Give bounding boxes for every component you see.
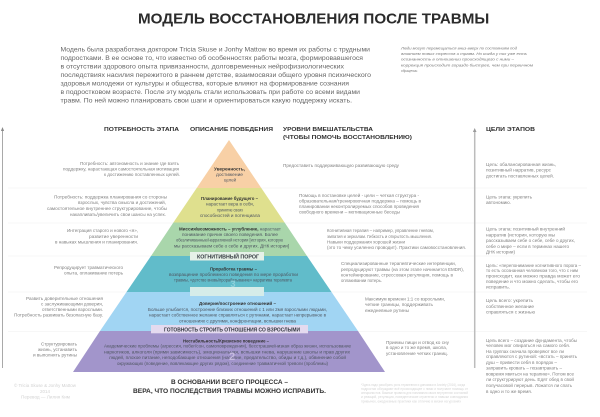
intro text block: травм. По ней можно планировать свои шаги и ориентироваться какую поддержку искать. <box>60 96 352 104</box>
pyramid level: trust <box>100 292 358 331</box>
goal: row 2 <box>486 194 533 205</box>
intervention: row 2: образовательная/тренировочная поддержка – помощь в <box>299 198 422 204</box>
need: row 1: поддержку, нарастающая самостоятельная мотивация <box>63 166 179 172</box>
need: row 2: самостоятельное внутреннее структурирование, чтобы <box>47 206 167 211</box>
text: confidence level: Уверенность, <box>214 166 245 172</box>
goal: row 4: то есть осознанная человеком того, что с ним <box>486 268 578 273</box>
intervention: row 4: контейнирование, стрессовая регуляция, помощь в <box>341 272 454 278</box>
need: row 4: опыта, оплакивание потерь <box>64 270 124 276</box>
text: confidence level: достижение <box>216 172 244 177</box>
bottom statement: В ОСНОВАНИИ ВСЕГО ПРОЦЕССА – <box>171 379 288 386</box>
text: trauma processing level <box>169 266 299 289</box>
text: trust level: Доверие/построение отношений – <box>199 300 276 306</box>
footnote: подростки обсуждают всё происходящее с ними и получают помощь от <box>361 387 469 391</box>
need: row 6: и выполнять рутины <box>33 352 77 358</box>
intervention: row 3: эмпатия и зеркалам. Гибкость и открытость мышления. <box>327 234 432 239</box>
intervention: row 3: Когнитивная терапия – например, управление гневом, <box>327 228 434 233</box>
intervention: row 4 <box>341 261 464 283</box>
goal: row 1: позитивный нарратив, ресурс <box>486 166 552 172</box>
need: row 1 <box>63 161 180 177</box>
goal: row 6: человек мог опираться на самого себя. <box>486 343 570 348</box>
footnote: специалистов. Важные правила для понимания своих внутренних состояний <box>361 391 468 395</box>
text: planning level: принятие своих <box>217 207 244 212</box>
text: unstable behaviour level: Академические проблемы (агрессия, побег/сон, самоповреждения), бесстрашие/низкая образ жизни, использование <box>104 344 352 349</box>
need: row 6: жизнь, устанавить <box>38 347 78 352</box>
intervention column <box>283 163 466 356</box>
goal: row 4: Цель: «перепонимание когнитивного порога – <box>486 263 581 268</box>
intervention: row 5: Максимум времени 1:1 со взрослыми, <box>365 296 445 302</box>
goal: row 2: Цель этапа: укрепить <box>486 194 533 200</box>
goal: row 3 <box>486 226 575 254</box>
text: mission level <box>174 225 289 248</box>
need: row 4 <box>54 265 124 276</box>
intervention: row 6: в одно и то же время, школа, <box>386 345 447 350</box>
goal: row 5: справляться с жизнью <box>486 310 536 314</box>
goal: row 6: ли структурируют день. Едят обед в свой <box>486 376 574 382</box>
text: confidence level <box>214 166 245 182</box>
footnote: привычек, ежедневные практики как отличие в жизни на уровнях <box>361 400 461 404</box>
intervention: row 3: Навыки поддержания хорошей жизни <box>327 238 405 244</box>
goal: row 6: получасовой перерыв. Ложатся ли спать <box>486 382 573 388</box>
title: МОДЕЛЬ ВОССТАНОВЛЕНИЯ ПОСЛЕ ТРАВМЫ <box>138 12 489 27</box>
text: trust level: нарастает собственное желание справляться с рутинами, нарастает непрерывное в <box>149 313 327 318</box>
side note <box>400 46 533 73</box>
text: planning level <box>200 195 260 218</box>
goal: row 6: душ – привести себя в порядок – <box>486 360 557 365</box>
text: trauma processing level: травмы, «детство вновь/прорабатывание» нарратива терапевта <box>174 277 292 282</box>
goal: row 3: ДНК истории) <box>486 250 515 254</box>
need: row 2 <box>47 194 167 217</box>
side note: влиянием новых стрессов и травм. Но когда у них уже есть <box>401 51 527 56</box>
intro text block: здоровья молодежи от культуры и общества, которые влияют на формирование сознания <box>60 79 349 87</box>
column headings: (ЧТОБЫ ПОМОЧЬ ВОССТАНОВЛЕНИЮ) <box>283 135 412 141</box>
text: trauma processing level: 3 <box>230 279 236 289</box>
goal: row 6: заправить кровать – позавтракать – <box>486 366 562 370</box>
need: row 5: ответственными взрослыми. <box>42 307 103 312</box>
text: mission level: мы рассказываем себе о себе и других. ДНК истории] <box>174 243 289 248</box>
text: unstable behaviour level: 2 <box>229 351 235 363</box>
copyright credit: Перевод — Лилия Ким <box>21 394 70 400</box>
label: cognitive threshold: КОГНИТИВНЫЙ ПОРОГ <box>197 252 259 260</box>
goal: row 6: справляются с рутиной: «встать – принять <box>486 353 578 359</box>
intervention: row 3: (это то чему усиленно проводит). Практики самовосстановления. <box>327 245 466 250</box>
goal: row 1: Цель: обалансированная жизнь, <box>486 162 556 167</box>
text: trauma processing level: Проработка травмы – <box>210 266 257 272</box>
intervention: row 4: репродуцируют травмы (на этом этапе начинается EMDR), <box>341 267 464 272</box>
bottom statement: ВЕРА, ЧТО ПОСЛЕДСТВИЯ ТРАВМЫ МОЖНО ИСПРАВИТЬ. <box>133 388 326 395</box>
goal: row 3: себе о мире – если в терминах нашего <box>486 244 569 249</box>
goal: row 3: нарратив (история, которую мы <box>486 232 555 238</box>
arrow: left vertical axis <box>1 127 4 368</box>
copyright credit: 2014 <box>40 389 50 394</box>
bottom statement <box>133 379 326 395</box>
intervention: row 6 <box>386 340 450 356</box>
intro text block: последствиях насилия пережитого в раннем детстве, взаимосвязи общего уровня психического <box>60 71 372 79</box>
intervention: row 6: установление четких границ. <box>386 351 448 356</box>
label: readiness to build relationships <box>151 325 308 334</box>
label: empty threshold bar <box>190 287 264 296</box>
need: row 3 <box>55 228 138 244</box>
goal: row 5: Цель всего: укрепить <box>486 298 534 303</box>
goal: row 4: исправить. <box>486 284 510 290</box>
intro text block: Модель была разработана доктором Tricia Skuse и Jonhy Mattow во время их работы с трудными <box>60 46 371 54</box>
side note: обращении. <box>401 68 418 73</box>
need: row 5: с заслуживающими доверия, <box>41 302 103 306</box>
goals column <box>486 162 581 394</box>
intervention: row 6: Приемы пищи и отвод ко сну <box>386 340 450 345</box>
need: row 6 <box>33 342 78 358</box>
footnote <box>361 383 469 404</box>
copyright credit: © Tricia Skuse & Jonhy Mattow <box>14 382 77 388</box>
arrow: right vertical axis <box>473 128 476 368</box>
need: row 6: Структурировать <box>41 342 78 346</box>
goal: row 4: поведение и что можно сделать, чтобы его <box>486 279 578 284</box>
need: row 3: в навыках мышления и планирования. <box>55 240 138 244</box>
intervention: row 4: оплакивании потерь. <box>341 278 382 283</box>
need: row 2: накапливать/увеличить свои шансы на успех. <box>70 212 166 217</box>
text: confidence level: целей <box>224 176 236 182</box>
goal: row 1: достигать поставленных целей. <box>486 172 554 178</box>
need: row 5: Развить доверительные отношения <box>26 296 104 301</box>
side note: Люди могут перемещаться вниз-вверх по состояниям под <box>400 46 518 50</box>
side note: коррекция происходит гораздо быстрее, чем при первичном <box>401 62 533 67</box>
need: row 3: развитие уверенности <box>89 234 138 239</box>
need: row 5: Потребность развивать безопасную базу. <box>14 312 103 318</box>
need: row 4: Репродуцирует травматического <box>54 265 123 270</box>
text: mission level: понимание причин своего поведения. Более <box>182 232 279 237</box>
intervention: row 2 <box>299 192 422 214</box>
intervention: row 3 <box>327 228 466 250</box>
goal: row 6: На группах сначала проверяют все ли <box>486 349 564 354</box>
need: row 2: Потребность: поддержка планирования со стороны <box>54 194 167 200</box>
intervention: row 2: свободного времени – мотивационные беседы <box>299 210 400 214</box>
goal: row 3: Цель этапа: позитивный внутренний <box>486 226 565 232</box>
goal: row 6: вовремя явиться на терапию». Потом все <box>486 372 574 376</box>
column headings: ОПИСАНИЕ ПОВЕДЕНИЯ <box>190 127 273 133</box>
text: unstable behaviour level: окружающих (поведение, вовлекающее других рядом), соединение травматичной тревоги (проблемы) <box>117 360 328 366</box>
column headings: ПОТРЕБНОСТЬ ЭТАПА <box>104 127 180 133</box>
needs column <box>14 161 180 358</box>
intervention: row 5: ежедневные рутины <box>365 308 409 313</box>
text: unstable behaviour level <box>104 337 352 366</box>
text: trust level <box>148 300 327 323</box>
goal: row 6: в одно и то же время. <box>486 389 532 394</box>
pyramid level: trauma processing <box>126 256 332 292</box>
text: mission level: обезличиванные/нарративной истории [история, которую <box>176 237 284 243</box>
intervention: row 4: Специализированные терапевтические интервенции, <box>341 261 456 266</box>
text: unstable behaviour level: Нестабильность/Кризисное поведение – <box>183 337 269 343</box>
goal: row 6 <box>486 338 578 394</box>
text: planning level: способностей и потенциала <box>200 212 260 218</box>
text: unstable behaviour level: людей, плохое питание, неподобающие отношения (насилие, предательство, обиды и т.д.), обвинение собой <box>109 354 346 360</box>
label: cognitive threshold <box>190 252 264 260</box>
text: trauma processing level: возвращение проблемного поведения по мере проработки <box>169 272 299 277</box>
goal: row 4 <box>486 263 581 290</box>
goal: row 4: происходит, как можно правда может его <box>486 274 580 278</box>
footnote: *Здесь надо разобрать роль терапевтов и динамики в Anxiety (2016), когда <box>361 383 465 387</box>
pyramid level: mission <box>151 222 307 256</box>
pyramid level: planning <box>173 188 285 222</box>
need: row 3: Интеграция старого и нового «я», <box>67 228 138 233</box>
need: row 1: к достижению поставленных целей. <box>104 171 180 177</box>
need: row 1: Потребность: автономность и знание где взять <box>80 161 180 166</box>
goal: row 3: рассказываем себе о себе, себе о других, <box>486 238 575 243</box>
intro text block: подростками. В ее основе то, что известно об особенностях работы мозга, формировавшегося <box>60 54 363 62</box>
text: planning level: Планирование будущего – <box>201 195 258 201</box>
copyright credit <box>14 382 77 400</box>
text: trust level: Больше улыбается, построение близких отношений с 1 или 2мя взрослыми людьми, <box>148 306 327 312</box>
column headings <box>104 127 535 141</box>
intervention: row 5 <box>365 296 445 313</box>
goal: row 2: автономию. <box>486 200 511 205</box>
text: trust level: отношениях с другими, конфронтации, вспышки гнева <box>179 318 296 323</box>
intervention: row 1: Предоставить поддерживающую развивающую среду <box>283 163 400 168</box>
pyramid <box>73 140 385 372</box>
label: readiness to build relationships: ГОТОВНОСТЬ СТРОИТЬ ОТНОШЕНИЯ СО ВЗРОСЛЫМИ <box>164 328 300 334</box>
intervention: row 2: Помощь в постановке целей - цели – четкая структура - <box>299 192 419 198</box>
intervention: row 5: четкие границы, поддерживать <box>365 302 434 307</box>
column headings: ЦЕЛИ ЭТАПОВ <box>486 127 535 133</box>
text: unstable behaviour level: наркотиков, алкоголя (прими зависимость), эмоциональная, вспышки гнева, нарушение школы и прав других <box>104 349 351 354</box>
side note: осознанность в отношении происходящего с ними – <box>401 57 515 62</box>
pyramid level: confidence <box>197 140 261 188</box>
footnote: и реакций, регуляция, поведенческие стратегии и навыки совладания <box>361 395 468 399</box>
need: row 2: взрослых, чувства смысла и достижений, <box>78 199 166 205</box>
goal: row 5 <box>486 298 536 314</box>
pyramid level: unstable behaviour <box>73 331 385 372</box>
goal: row 6: Цель всего – создание фундамента, чтобы <box>486 338 577 343</box>
text: mission level: Миссия/возможность – углубление, нарастает <box>179 225 281 231</box>
goal: row 5: собственное желание <box>486 304 534 309</box>
intro text block <box>60 46 372 104</box>
column headings: УРОВНИ ВМЕШАТЕЛЬСТВА <box>283 127 374 133</box>
goal: row 1 <box>486 162 556 178</box>
intervention: row 2: планировании неконтролируемых способов проведения <box>299 204 419 209</box>
text: planning level: нарастает вера в себя, <box>206 202 254 207</box>
need: row 5 <box>14 296 104 318</box>
intro text block: в отсутствии здорового опыта привязанности, долговременных нейрофизиологических <box>60 62 345 70</box>
intro text block: в подростковом возрасте. После эту модель стали использовать при работе со всеми видами <box>60 88 361 96</box>
